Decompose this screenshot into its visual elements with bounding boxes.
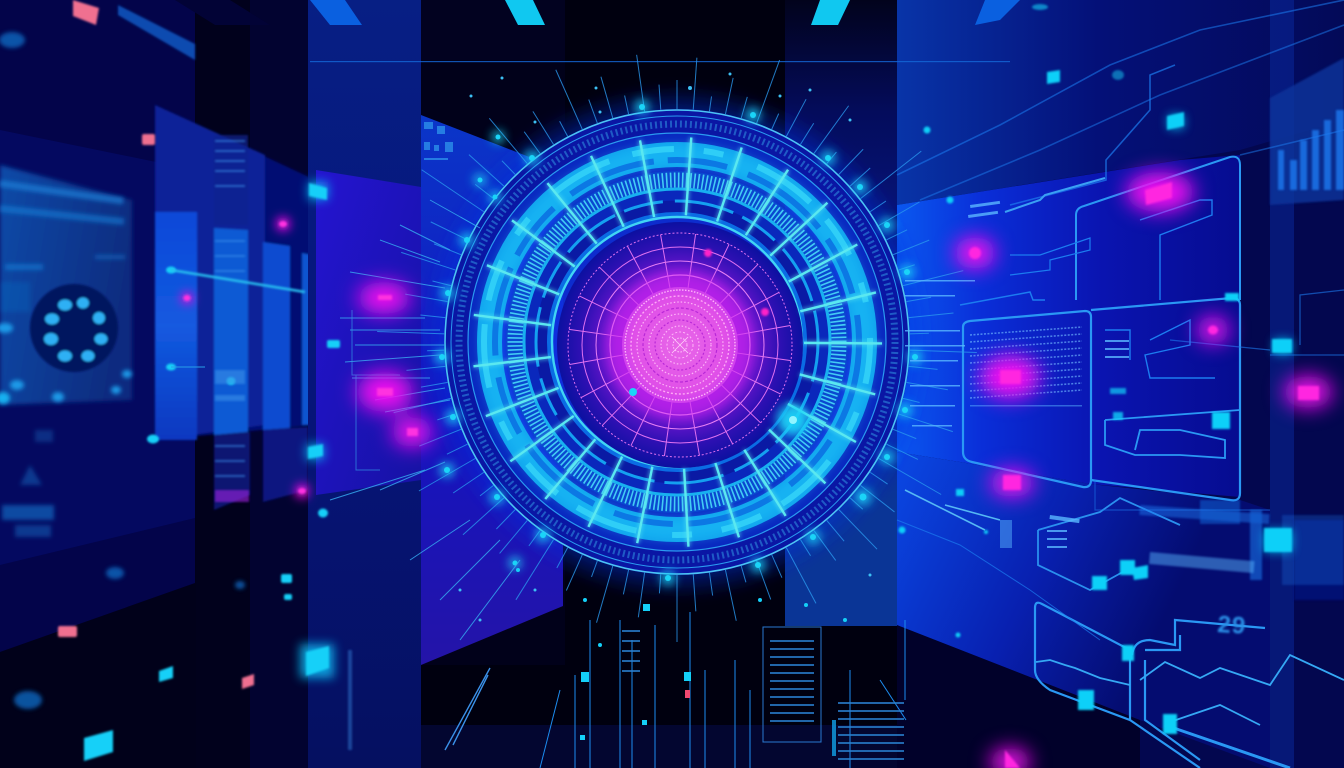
chart: lower centre data terminals: [445, 612, 906, 768]
chart: pink data core: [606, 271, 754, 419]
text block: terminal code blocks: [622, 630, 904, 760]
panel: right floor shadow: [897, 625, 1140, 768]
text block: streak lines left of ring: [330, 200, 520, 640]
icon: left side cyan and magenta chips: [0, 0, 432, 761]
text block: blurred number label: 29: [1217, 611, 1247, 640]
panel: left violet screen: [316, 170, 421, 495]
icon: glowing nodes around ring: [435, 100, 922, 585]
panel: far left layered screens: [0, 0, 308, 768]
panel: left translucent bright columns: [155, 105, 326, 510]
panel: left vertical glass strip: [308, 0, 421, 768]
panel: centre-left blue screen: [421, 115, 563, 665]
chart: radial data rays around ring: [377, 55, 977, 642]
icon: right side magenta and cyan chips: [898, 4, 1332, 768]
panel: right dark wall: [897, 0, 1344, 768]
panel: right lower screen: [897, 452, 1270, 768]
panel: centre right strip: [785, 0, 897, 626]
text block: right panel streaks and data rows: [905, 110, 1344, 640]
text block: blurred column data on left screens: [215, 140, 352, 750]
chart: inner violet grid disc: [557, 222, 803, 468]
icon: blurred ring of dots on left screen: [30, 284, 118, 372]
panel: right upper wall: [897, 0, 1344, 205]
chart: concentric cyan ring structure: [445, 110, 909, 574]
panel: right lit screen: [897, 155, 1240, 497]
chart: glow halo behind central ring: [419, 84, 935, 600]
panel: right circuit traces: [897, 0, 1344, 768]
panel: right edge glass strip: [1270, 0, 1344, 768]
text block: blurred data rows on left screen: [0, 180, 132, 537]
icon: lower centre cyan chips: [516, 568, 847, 740]
chart: cyan spokes across ring: [473, 137, 882, 547]
text block: left screen icons on centre panel: [424, 122, 453, 160]
icon: magenta sparks on inner disc: [704, 249, 769, 316]
arrow: top cyan light trapezoids: [310, 0, 1020, 768]
icon: scattered small dots above ring: [458, 72, 872, 622]
